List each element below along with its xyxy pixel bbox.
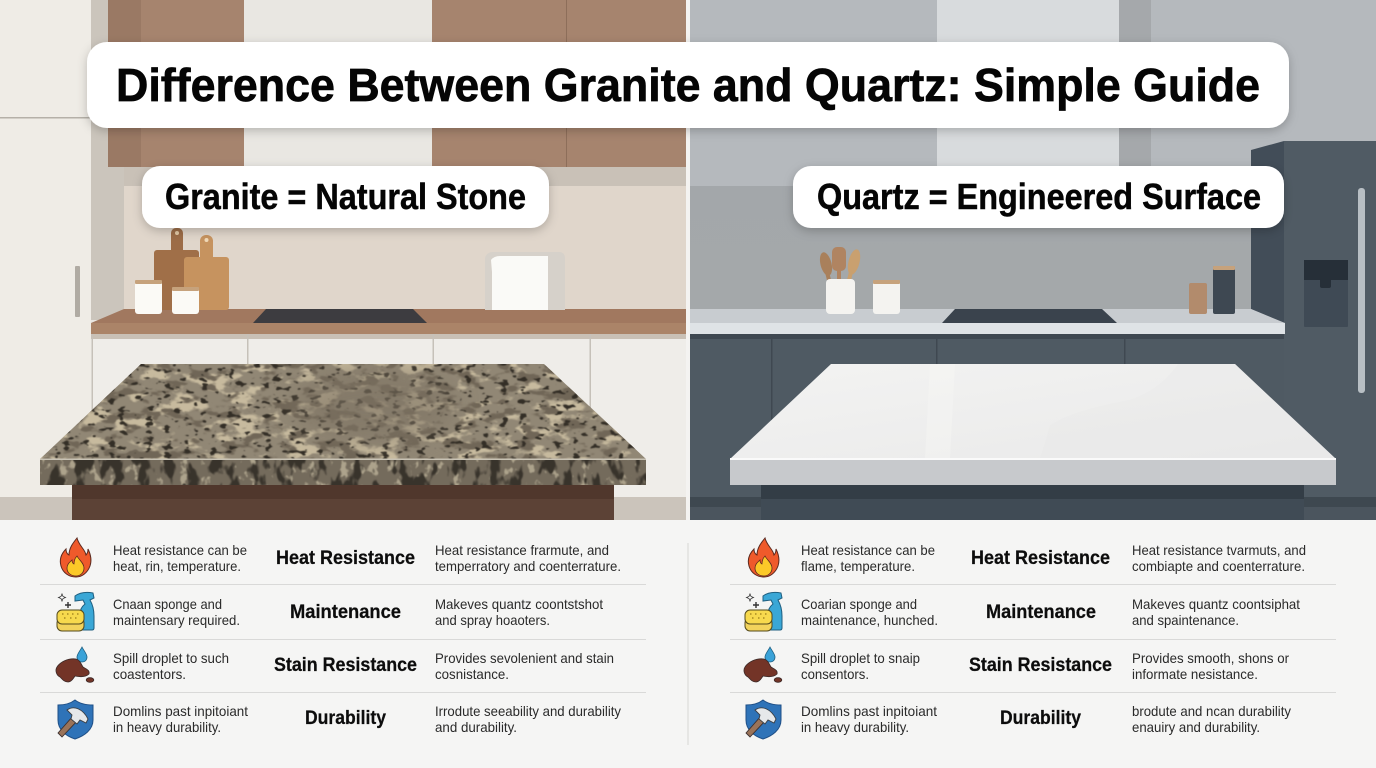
row: stain resistance: Spill droplet to such [113, 650, 229, 666]
cooktop [942, 309, 1117, 323]
row: stain resistance: coastentors. [113, 666, 186, 682]
row: heat resistance: Heat Resistance [276, 547, 415, 569]
base cabinets [690, 334, 1284, 497]
row: durability: Domlins past inpitoiant [801, 703, 937, 719]
icon: sponge and spray [745, 592, 782, 631]
backsplash [124, 186, 686, 309]
row: durability: enauiry and durability. [1132, 719, 1260, 735]
base cabinets [91, 334, 686, 497]
granite countertop front edge [40, 460, 646, 485]
row: maintenance: and spaintenance. [1132, 612, 1239, 628]
row: stain resistance: Provides smooth, shons or [1132, 650, 1289, 666]
side wall [91, 0, 124, 320]
row: maintenance: maintenance, hunched. [801, 612, 938, 628]
row: heat resistance [113, 542, 621, 574]
row: maintenance: Cnaan sponge and [113, 596, 222, 612]
cooktop [253, 309, 427, 323]
island base [72, 485, 614, 520]
row: heat resistance: Heat resistance can be [113, 542, 247, 558]
icon: sponge and spray [57, 592, 94, 631]
row: durability: Durability [305, 707, 386, 729]
row: stain resistance [113, 650, 614, 682]
row: maintenance: Coarian sponge and [801, 596, 917, 612]
row: durability: Irrodute seeability and durability [435, 703, 621, 719]
row: heat resistance [801, 542, 1306, 574]
icon: flame [748, 538, 779, 577]
row: maintenance: and spray hoaoters. [435, 612, 550, 628]
row: durability: Domlins past inpitoiant [113, 703, 248, 719]
row: heat resistance: combiapte and coenterrature. [1132, 558, 1305, 574]
row: stain resistance: cosnistance. [435, 666, 509, 682]
row: stain resistance: consentors. [801, 666, 869, 682]
icon: spill stain [744, 647, 782, 682]
row: durability: brodute and ncan durability [1132, 703, 1291, 719]
icon: flame [60, 538, 91, 577]
row: heat resistance: Heat resistance can be [801, 542, 935, 558]
row: stain resistance: Stain Resistance [274, 654, 417, 676]
wall cabinets [937, 0, 1251, 186]
row: durability [113, 703, 621, 735]
row: stain resistance: Provides sevolenient and stain [435, 650, 614, 666]
floor [690, 497, 1376, 520]
row: maintenance: Makeves quantz coontsiphat [1132, 596, 1300, 612]
quartz countertop front edge [730, 458, 1336, 485]
wall cabinets [108, 0, 686, 186]
row: heat resistance: flame, temperature. [801, 558, 915, 574]
row: durability [801, 703, 1291, 735]
icon: spill stain [56, 647, 94, 682]
row: durability: in heavy durability. [801, 719, 909, 735]
row: stain resistance: informate nesistance. [1132, 666, 1258, 682]
panel: quartz kitchen scene [690, 0, 1376, 520]
row: maintenance: maintensary required. [113, 612, 240, 628]
floor [0, 497, 686, 520]
row: maintenance: Maintenance [986, 601, 1096, 623]
label: granite: Granite = Natural Stone [165, 176, 526, 217]
panel: granite comparison table [40, 538, 646, 739]
counter [690, 309, 1285, 334]
utensils and jars [818, 247, 1235, 314]
row: durability: Durability [1000, 707, 1081, 729]
row: durability: and durability. [435, 719, 517, 735]
paper towel appliance [485, 252, 565, 310]
panel: granite kitchen scene [0, 0, 686, 520]
island base [761, 485, 1304, 520]
tall cabinet [0, 0, 91, 497]
label: quartz [793, 166, 1284, 228]
divider between scenes [686, 0, 690, 520]
row: stain resistance: Spill droplet to snaip [801, 650, 920, 666]
title banner [87, 42, 1289, 128]
row: maintenance [801, 596, 1300, 628]
label: granite [142, 166, 549, 228]
cutting boards [154, 228, 229, 310]
row: heat resistance: Heat resistance tvarmuts, and [1132, 542, 1306, 558]
panel: quartz comparison table [730, 538, 1336, 739]
refrigerator [1251, 141, 1376, 497]
row: stain resistance [801, 650, 1289, 682]
counter [91, 309, 686, 334]
row: durability: in heavy durability. [113, 719, 221, 735]
row: heat resistance: Heat Resistance [971, 547, 1110, 569]
quartz countertop top face [730, 364, 1336, 459]
icon: shield and hammer [58, 700, 93, 739]
row: maintenance [113, 596, 603, 628]
row: heat resistance: temperratory and coenterrature. [435, 558, 621, 574]
row: stain resistance: Stain Resistance [969, 654, 1112, 676]
label: quartz: Quartz = Engineered Surface [817, 176, 1261, 217]
row: maintenance: Makeves quantz coontstshot [435, 596, 603, 612]
granite countertop top face [40, 364, 646, 458]
title banner: Difference Between Granite and Quartz: Simple Guide [116, 59, 1260, 111]
row: heat resistance: Heat resistance frarmute, and [435, 542, 609, 558]
jars [135, 280, 199, 314]
row: maintenance: Maintenance [290, 601, 401, 623]
row: heat resistance: heat, rin, temperature. [113, 558, 241, 574]
backsplash [690, 186, 1251, 309]
icon: shield and hammer [746, 700, 781, 739]
